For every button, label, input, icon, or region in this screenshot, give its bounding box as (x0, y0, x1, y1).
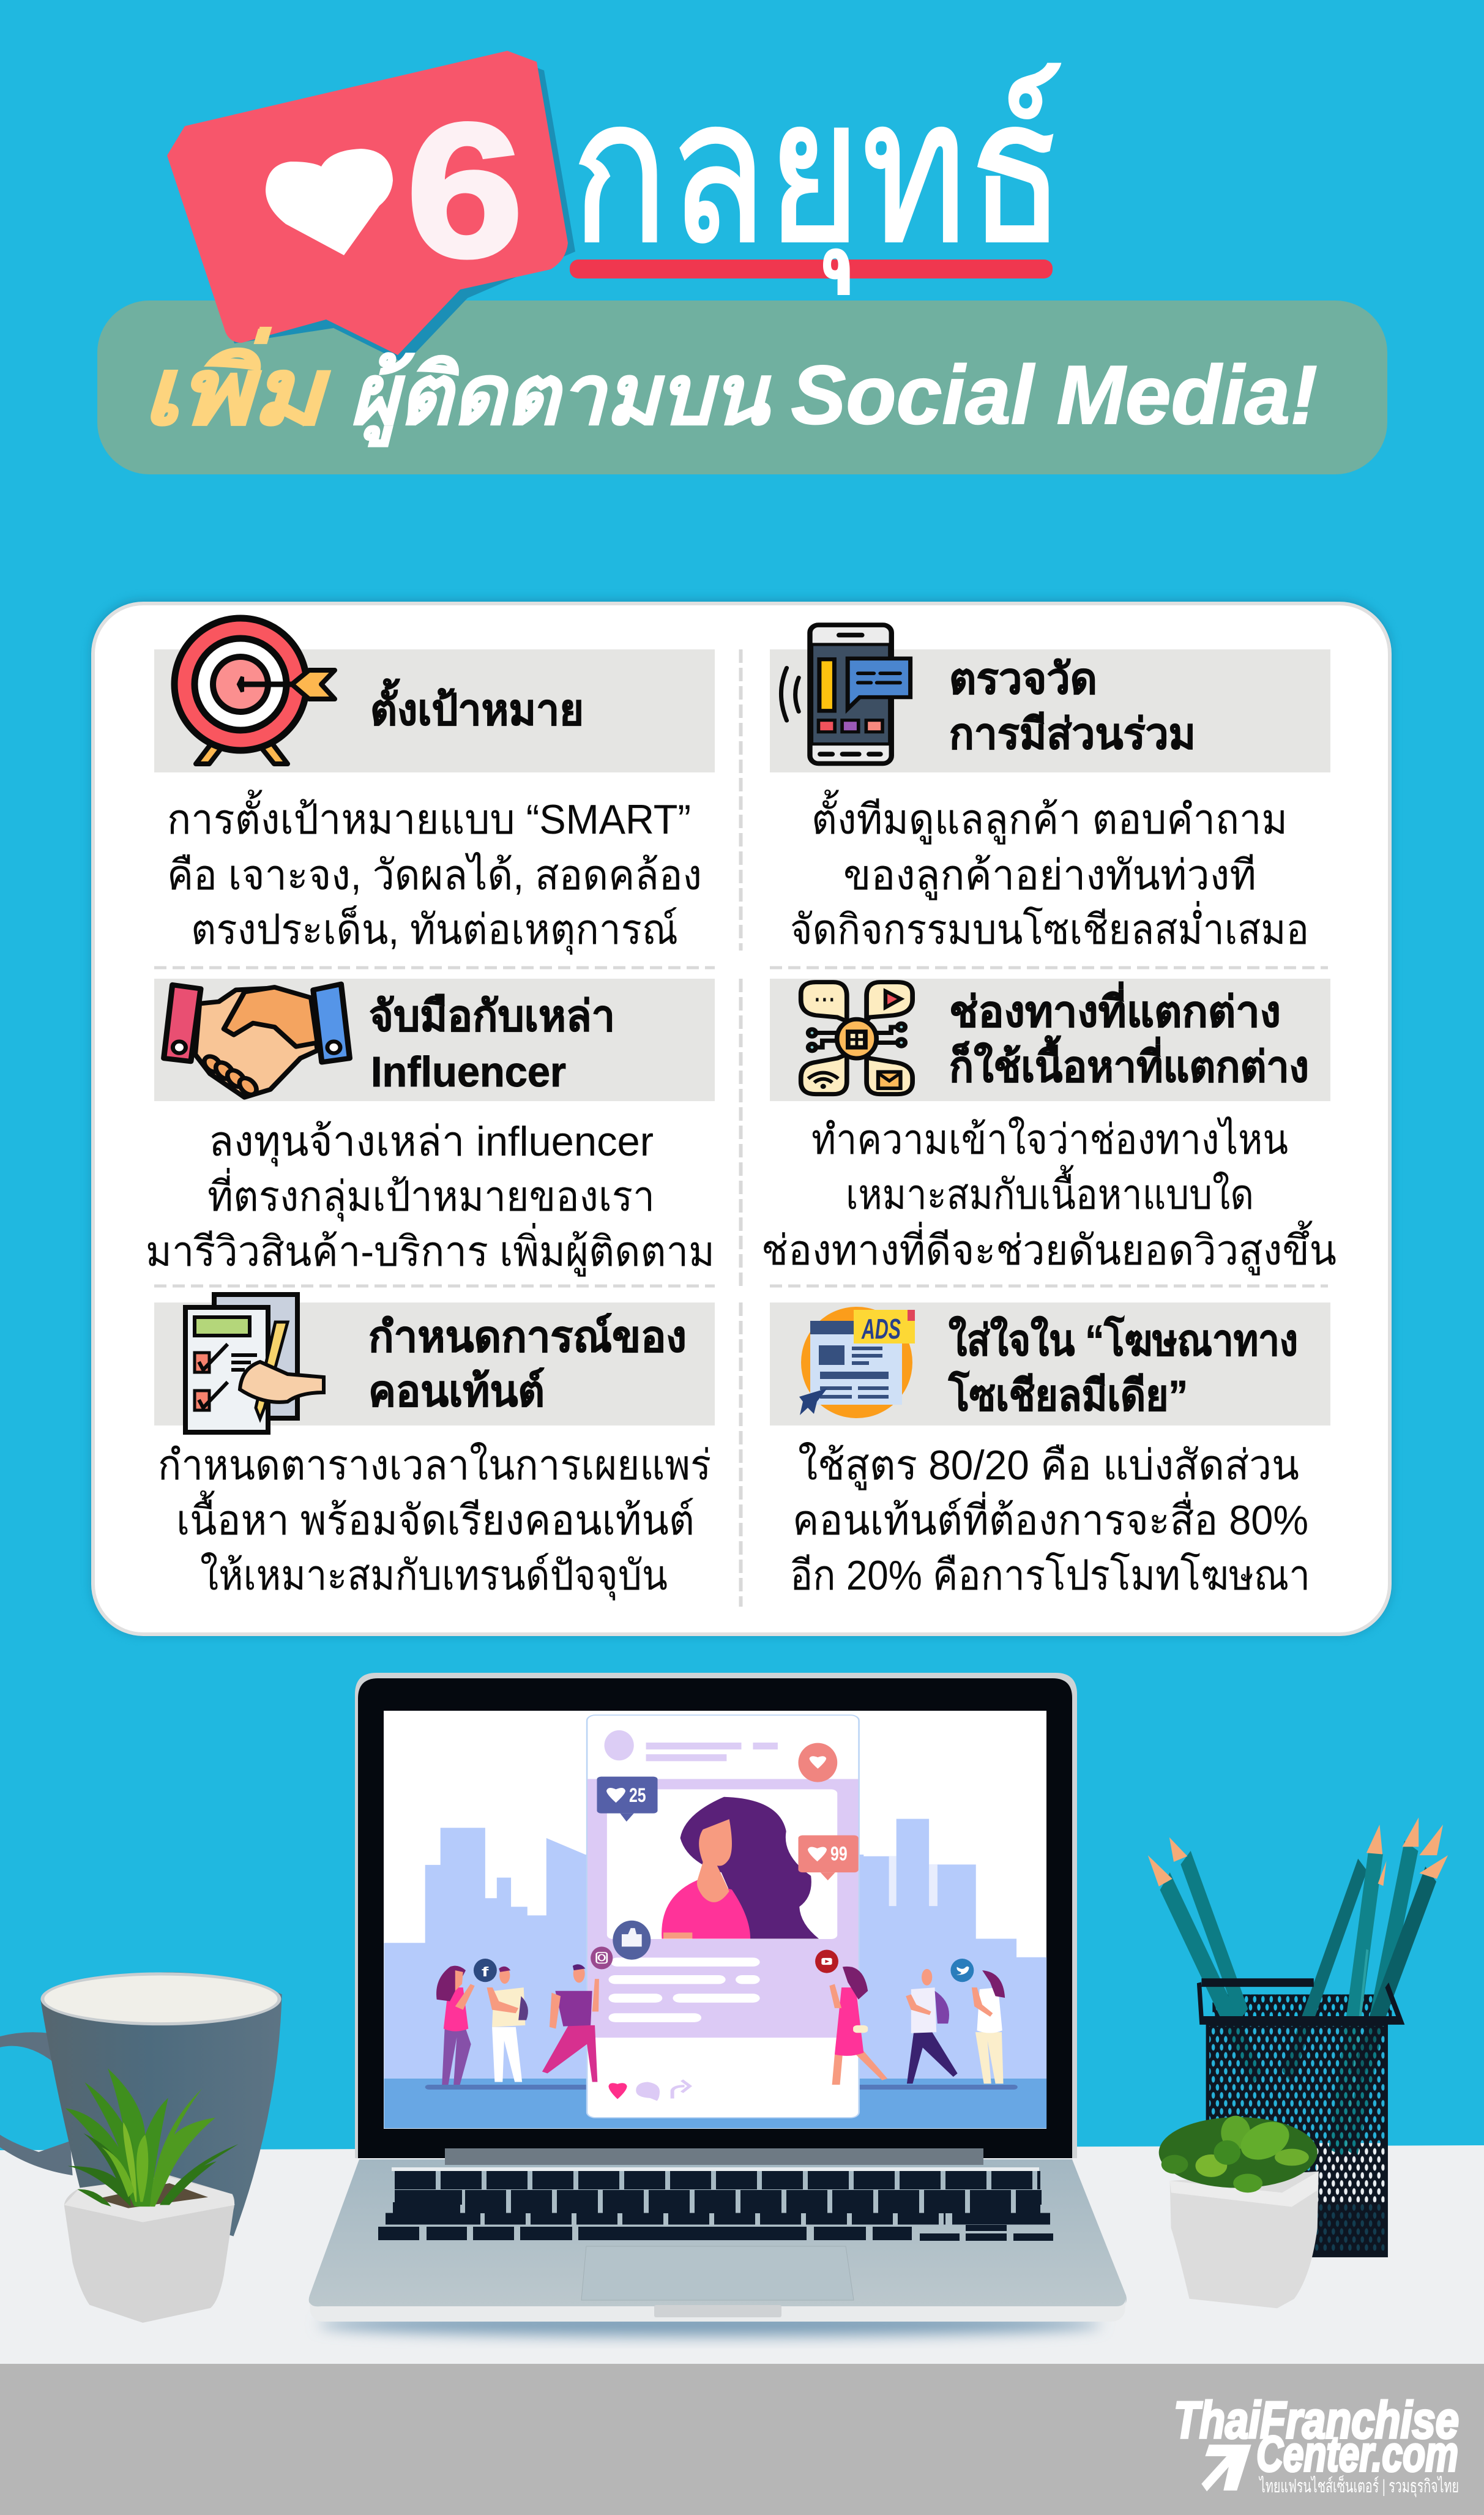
header bars (154, 649, 1330, 1426)
desk plant right (1159, 2116, 1319, 2308)
heading: Influencer (371, 1048, 566, 1096)
bottom actions (608, 2083, 627, 2099)
body text: จัดกิจกรรมบนโซเชียลสม่ำเสมอ (790, 901, 1309, 953)
person: man cream shirt (487, 1967, 528, 2082)
pencils (1165, 1846, 1431, 2153)
woman portrait (662, 1797, 819, 1938)
body text (158, 1441, 711, 1601)
logo: Thai Franchise Center (1174, 2391, 1459, 2498)
body text: เหมาะสมกับเนื้อหาแบบใด (846, 1165, 1254, 1218)
screen illustration (384, 1715, 1046, 2128)
icon: ads page (799, 1307, 915, 1418)
panel: six strategies card (91, 600, 1392, 1635)
plant pot (64, 2175, 234, 2323)
body text: ตรงประเด็น, ทันต่อเหตุการณ์ (191, 905, 678, 955)
city skyline (384, 1819, 1046, 2079)
mug (0, 1972, 282, 2237)
body text: กำหนดตารางเวลาในการเผยแพร่ (158, 1441, 711, 1489)
body text (761, 1116, 1337, 1276)
body text (146, 1118, 715, 1277)
heading (368, 1313, 687, 1415)
body text: คอนเท้นต์ที่ต้องการจะสื่อ 80% (792, 1492, 1308, 1544)
icon: target (174, 618, 335, 764)
body text: ลงทุนจ้างเหล่า influencer (209, 1118, 654, 1167)
heading: คอนเท้นต์ (368, 1367, 545, 1415)
body text: การตั้งเป้าหมายแบบ “SMART” (167, 790, 691, 843)
heading: จับมือกับเหล่า (369, 992, 615, 1040)
body text: เนื้อหา พร้อมจัดเรียงคอนเท้นต์ (176, 1490, 695, 1544)
heading: ตรวจวัด (949, 655, 1097, 703)
person: man white shirt (906, 1969, 958, 2083)
icon: channels network (801, 982, 912, 1094)
item 6: social media ads (790, 1307, 1310, 1599)
icon: logo arrow (1201, 2444, 1252, 2492)
icon: facebook: f (482, 1965, 489, 1980)
mesh holder (1207, 2023, 1386, 2254)
people (436, 1964, 1005, 2085)
icon: youtube (815, 1949, 838, 1973)
body text (790, 790, 1309, 953)
desk plant left (64, 2068, 238, 2323)
item 1: set goals (167, 618, 702, 955)
body text: มารีวิวสินค้า-บริการ เพิ่มผู้ติดตาม (146, 1223, 715, 1277)
bubble: 99 likes: 99 (830, 1842, 848, 1864)
heading (949, 981, 1309, 1091)
succulent leaves (65, 2068, 238, 2207)
desk surface (0, 2145, 1484, 2364)
social post card (587, 1715, 859, 2118)
column divider (739, 649, 743, 1607)
heading: กำหนดการณ์ของ (368, 1313, 687, 1361)
laptop lid (355, 1673, 1077, 2158)
heading: ช่องทางที่แตกต่าง (949, 981, 1281, 1036)
person: woman phone left (436, 1966, 475, 2085)
subtitle: followers on social media: ผู้ติดตามบน Social Media! (350, 348, 1318, 447)
body text: คือ เจาะจง, วัดผลได้, สอดคล้อง (167, 851, 702, 899)
body text: ตั้งทีมดูแลลูกค้า ตอบคำถาม (811, 790, 1288, 845)
pencil holder with pencils (1148, 1817, 1448, 2254)
icon: handshake (164, 984, 349, 1097)
person: woman white top (972, 1970, 1005, 2083)
screen (384, 1711, 1046, 2129)
succulent (1159, 2116, 1318, 2192)
person: man walking purple (542, 1964, 599, 2082)
icon: facebook (474, 1959, 497, 1982)
like bubble badge (167, 51, 575, 364)
bubble: 25 likes: 25 (629, 1784, 646, 1806)
item 4: different channels different content (761, 981, 1337, 1276)
body text: ให้เหมาะสมกับเทรนด์ปัจจุบัน (200, 1552, 668, 1601)
heading: ใส่ใจใน “โฆษณาทาง (949, 1315, 1298, 1364)
item 2: measure engagement (781, 625, 1309, 953)
body text: ทำความเข้าใจว่าช่องทางไหน (811, 1116, 1288, 1163)
number six: 6 (406, 84, 523, 296)
subtitle pill (97, 301, 1387, 474)
icon: heart (266, 149, 393, 255)
icon: ads page: ADS (861, 1313, 901, 1345)
heading (369, 992, 615, 1096)
keyboard (378, 2180, 1053, 2237)
heading (948, 1315, 1298, 1419)
icon: thumbs up (613, 1921, 651, 1960)
heading: การมีส่วนร่วม (949, 710, 1196, 758)
footer band (0, 2364, 1484, 2515)
person: woman pink dress (829, 1967, 887, 2085)
subtitle: increase: เพิ่ม (142, 327, 330, 443)
body text: ใช้สูตร 80/20 คือ แบ่งสัดส่วน (798, 1441, 1299, 1490)
title underline (570, 260, 1053, 278)
laptop shadow (318, 2312, 1102, 2336)
laptop base (309, 2159, 1127, 2322)
body text (790, 1441, 1310, 1599)
hinge (445, 2148, 983, 2165)
item 5: schedule content (158, 1295, 711, 1601)
title: strategies: กลยุทธ์ (571, 58, 1065, 295)
bubble: 25 likes (597, 1777, 658, 1822)
heading (949, 655, 1196, 758)
body text: ของลูกค้าอย่างทันท่วงที (843, 852, 1256, 900)
heading: โซเชียลมีเดีย” (948, 1370, 1188, 1419)
bubble: 99 likes (798, 1836, 859, 1880)
body text (167, 790, 702, 955)
ground (384, 2079, 1046, 2128)
icon: checklist with hand (185, 1295, 324, 1432)
body text: อีก 20% คือการโปรโมทโฆษณา (790, 1552, 1310, 1599)
body text: ที่ตรงกลุ่มเป้าหมายของเรา (207, 1168, 655, 1222)
item 3: partner with influencers (146, 984, 715, 1277)
heading: ตั้งเป้าหมาย (370, 678, 584, 734)
heading: ก็ใช้เนื้อหาที่แตกต่าง (949, 1035, 1309, 1091)
icon: heart badge (798, 1743, 837, 1782)
icon: instagram (591, 1946, 613, 1969)
body text: ช่องทางที่ดีจะช่วยดันยอดวิวสูงขึ้น (761, 1220, 1337, 1276)
laptop (309, 1673, 1127, 2336)
icon: phone (781, 625, 911, 763)
icon: twitter (950, 1959, 974, 1982)
plant pot (1170, 2172, 1319, 2308)
